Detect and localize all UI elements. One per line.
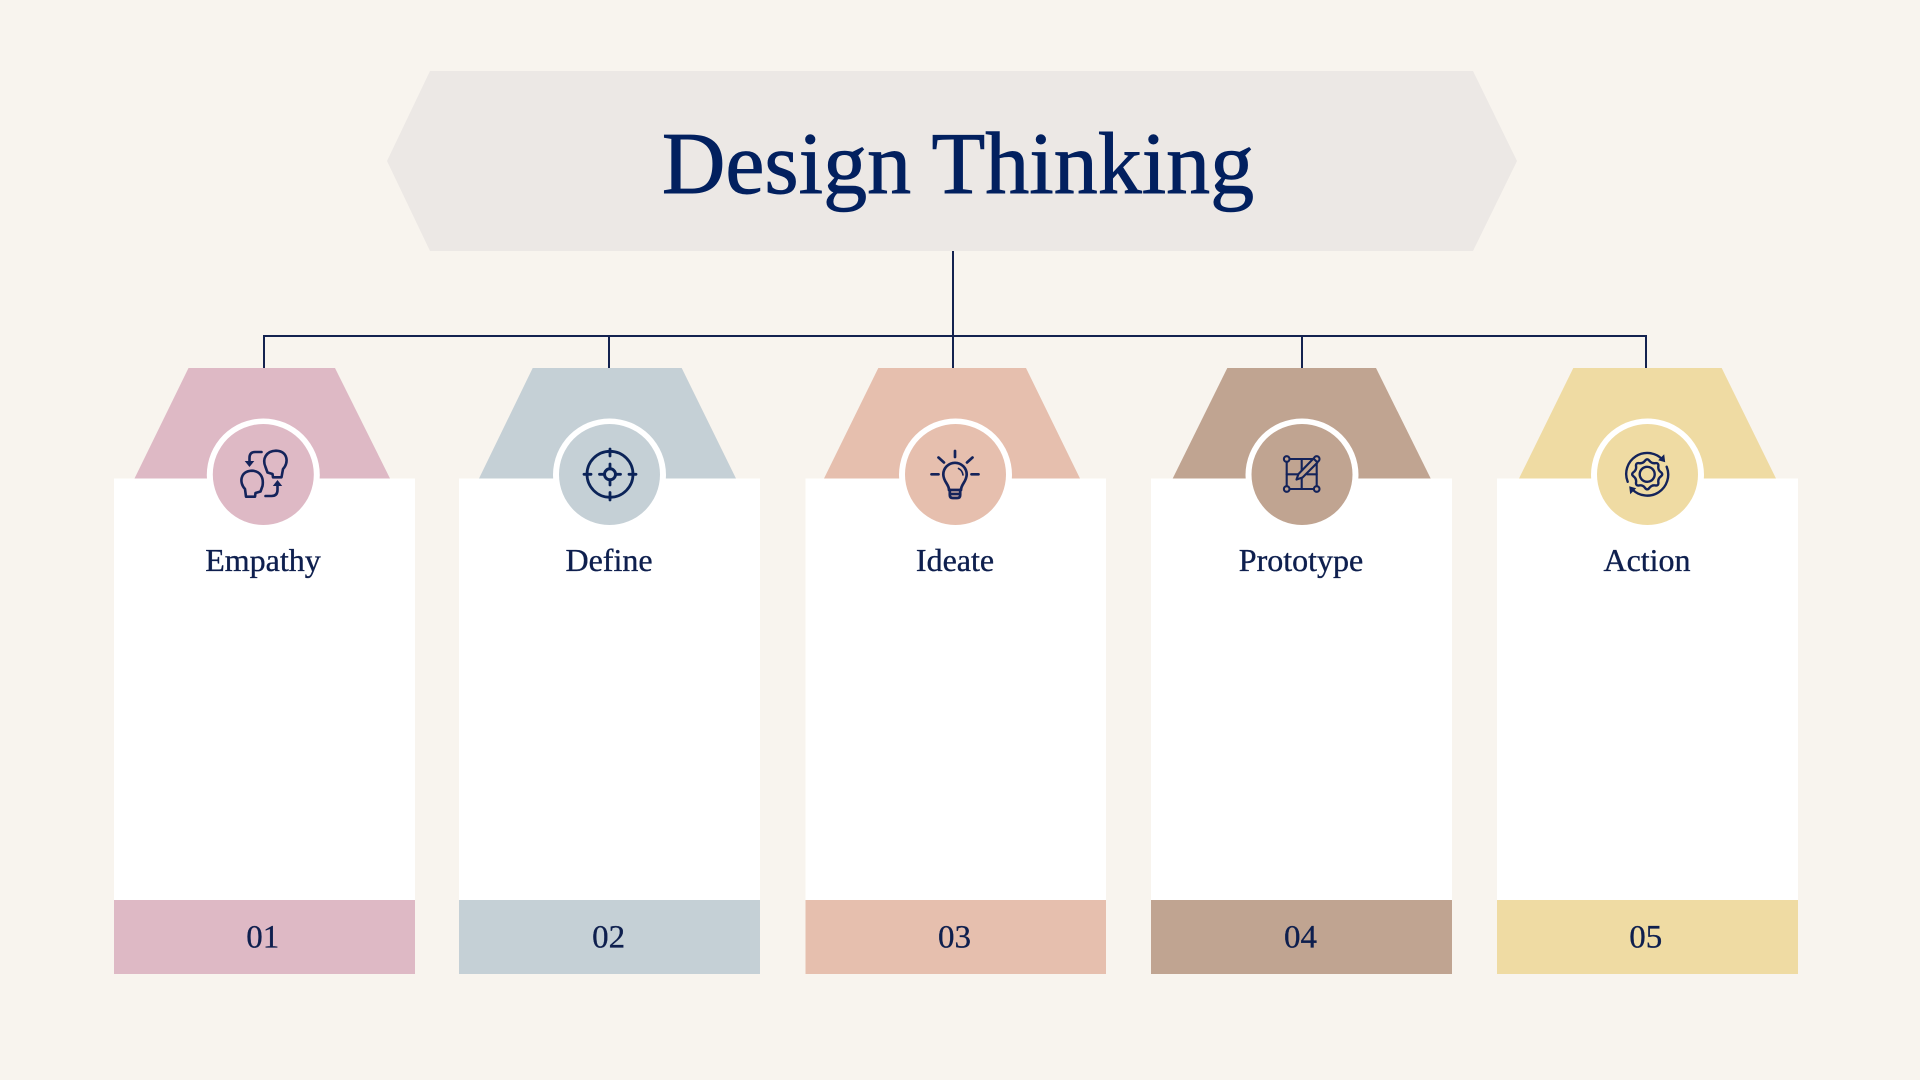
tab: Action bbox=[1519, 368, 1776, 478]
footer: 01: 01 bbox=[246, 920, 279, 956]
panel: Prototype bbox=[1151, 368, 1452, 974]
label: Prototype: Prototype bbox=[1239, 542, 1363, 578]
tab: Define bbox=[479, 368, 736, 478]
footer: 02 bbox=[459, 900, 760, 974]
footer: 05 bbox=[1497, 900, 1798, 974]
card body: Ideate bbox=[806, 478, 1106, 900]
label: Action: Action bbox=[1603, 542, 1691, 578]
footer: 03 bbox=[806, 900, 1106, 974]
card body: Action bbox=[1497, 478, 1798, 900]
footer: 04: 04 bbox=[1284, 920, 1317, 956]
card body: Define bbox=[459, 478, 760, 900]
icon badge: Empathy bbox=[207, 418, 320, 532]
icon badge: Define bbox=[553, 418, 666, 532]
footer: 01 bbox=[114, 900, 415, 974]
label: Ideate: Ideate bbox=[916, 542, 994, 578]
card body: Prototype bbox=[1151, 478, 1452, 900]
label: Define: Define bbox=[565, 542, 653, 578]
footer: 05: 05 bbox=[1629, 920, 1662, 956]
label: Empathy: Empathy bbox=[205, 542, 321, 578]
panel: Define bbox=[459, 368, 760, 974]
title: Design Thinking bbox=[662, 116, 1254, 213]
panel: Action bbox=[1497, 368, 1798, 974]
icon badge: Action bbox=[1591, 418, 1704, 532]
icon badge: Ideate bbox=[899, 418, 1012, 532]
card body: Empathy bbox=[114, 478, 415, 900]
icon badge: Prototype bbox=[1246, 418, 1358, 532]
tab: Empathy bbox=[134, 368, 390, 478]
footer: 03: 03 bbox=[938, 920, 971, 956]
panel: Empathy bbox=[114, 368, 415, 974]
footer: 04 bbox=[1151, 900, 1452, 974]
tab: Prototype bbox=[1173, 368, 1431, 478]
tab: Ideate bbox=[824, 368, 1080, 478]
footer: 02: 02 bbox=[592, 920, 625, 956]
panel: Ideate bbox=[806, 368, 1106, 974]
title banner bbox=[387, 71, 1517, 251]
connector lines bbox=[263, 251, 1647, 368]
